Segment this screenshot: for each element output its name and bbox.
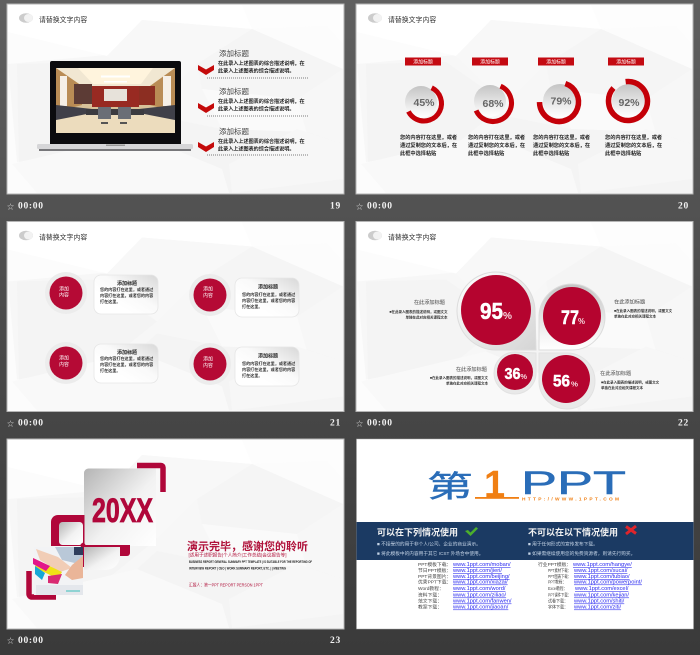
- links: right column: PPT素材下载：: [548, 567, 571, 574]
- card group top left: 内容打在这里，或者您的内容: [100, 292, 153, 298]
- label 56%: [600, 369, 660, 390]
- card group top right: 打在这里。: [242, 303, 262, 309]
- panel: slide 22 percentage bubbles: [356, 222, 693, 412]
- donut 92%: [605, 58, 662, 157]
- donut 92%: 您的内容打在这里，或者: [605, 133, 662, 141]
- donut 79%: 您的内容打在这里，或者: [533, 133, 590, 141]
- footer: slide 20: [356, 202, 689, 212]
- donut 79%: 此框中选择粘贴: [533, 149, 570, 157]
- footer: slide 21: 00:00: [18, 418, 44, 428]
- laptop with conference room photo: [37, 61, 193, 151]
- header: slide 22: 请替换文字内容: [388, 232, 436, 242]
- links: left column: Word教程：: [418, 585, 444, 592]
- card group bottom right: 添加标题: [258, 352, 278, 360]
- card group top right: 添加标题: [258, 284, 278, 290]
- header: slide 20: [368, 13, 436, 24]
- panel: slide 21 four cards: [7, 222, 344, 412]
- 20XX graphic: 20XX: [92, 492, 153, 530]
- label 77%: [614, 298, 673, 318]
- donut 68%: 68%: [482, 98, 504, 110]
- panel: slide 24 1PPT notice: [356, 439, 694, 629]
- footer: slide 22: [356, 418, 689, 428]
- header: slide 19: [19, 13, 87, 24]
- donut 79%: 添加标题: [546, 58, 566, 66]
- card group top right: 内容打在这里，或者您的内容: [242, 297, 295, 303]
- footer: slide 22: ☆: [356, 419, 363, 428]
- point 1: 此录入上述图表的综合描述说明。: [218, 68, 294, 74]
- footer: slide 23: 23: [330, 636, 341, 646]
- header: slide 20: 请替换文字内容: [388, 15, 436, 24]
- footer: slide 19: 19: [330, 202, 341, 212]
- links: right column: PPT图表下载：: [548, 573, 571, 580]
- links: left column: 节日PPT模板：: [418, 567, 451, 574]
- bubble 36%: [494, 352, 536, 394]
- band: usage rules: ■ 将此模板中的内容用于其它 ICST 外场合中使用。: [377, 550, 483, 557]
- card group bottom left: 添加: [59, 354, 69, 362]
- bubble 95%: %: [503, 311, 512, 322]
- donut 45%: 此框中选择粘贴: [400, 149, 437, 157]
- donut 68%: 添加标题: [480, 58, 500, 66]
- donut 45%: 您的内容打在这里，或者: [400, 133, 457, 141]
- label 95%: 在此添加标题: [414, 298, 445, 306]
- links: left column: www.1ppt.com/jiaoan/: [452, 604, 509, 610]
- point 1: [198, 48, 308, 78]
- label 56%: ■在此录入图表的描述说明，或图文文: [601, 380, 660, 384]
- links: left column: 资料下载：: [418, 592, 442, 598]
- band: usage rules: ■ 用于任何形式的宣传发布下载。: [528, 540, 598, 548]
- label 36%: 单独在此对应相关课程文本: [446, 380, 488, 386]
- bubble 36%: %: [520, 374, 528, 381]
- photo: hands with colour chart: [33, 547, 83, 595]
- point 2: 此录入上述图表的综合描述说明。: [218, 106, 294, 112]
- donut 92%: 通过复制您的文本后，在: [605, 141, 662, 149]
- band: usage rules: ■ 如果需继续使用您的免费资源者，则请先行购买。: [528, 550, 635, 557]
- point 3: 在此录入上述图表的综合描述说明，在: [218, 138, 305, 145]
- links: right column: 试卷下载：: [548, 598, 568, 604]
- donut 68%: 通过复制您的文本后，在: [468, 141, 525, 149]
- links: right column: www.1ppt.com/hangye/: [572, 562, 632, 568]
- card group bottom left: 打在这里。: [100, 367, 120, 373]
- label 36%: [430, 365, 488, 386]
- card group bottom right: 您的内容打在这里，或者通过: [242, 360, 295, 366]
- point 1: 添加标题: [219, 48, 249, 58]
- card group bottom right: 内容: [203, 362, 213, 369]
- links: right column: www.1ppt.com/ziti/: [573, 604, 622, 610]
- donut 45%: 添加标题: [413, 58, 433, 66]
- panel: slide 19 laptop with three points: [7, 4, 344, 194]
- donut 68%: 此框中选择粘贴: [468, 149, 505, 157]
- icon: red cross: [626, 526, 636, 534]
- point 2: [198, 86, 308, 116]
- donut 79%: [533, 58, 590, 157]
- donut 45%: 45%: [413, 97, 435, 109]
- card group top left: 添加: [59, 286, 69, 292]
- links: left column: www.1ppt.com/beijing/: [452, 574, 510, 580]
- band: usage rules: 不可以在以下情况使用: [528, 526, 618, 538]
- logo: 第1PPT: PPT: [521, 465, 626, 501]
- logo: 第1PPT: 1: [484, 464, 505, 506]
- card group top left: [45, 272, 158, 314]
- links: right column: PPT教程：: [548, 578, 566, 586]
- card group bottom left: 添加标题: [117, 349, 137, 356]
- bubble 56%: %: [571, 380, 578, 388]
- links: left column: www.1ppt.com/xiazai/: [452, 580, 508, 586]
- logo: 第1PPT: 第: [427, 471, 473, 504]
- card group bottom left: 内容打在这里，或者您的内容: [100, 361, 153, 367]
- links: left column: www.1ppt.com/moban/: [452, 562, 511, 568]
- label 56%: 在此添加标题: [600, 369, 631, 377]
- header: slide 22: [368, 231, 436, 242]
- point 3: 添加标题: [219, 126, 249, 136]
- closing message: INTERVIEW REPORT | CEO | WORK SUMMARY REPORT, ETC. | | MEETING: [189, 566, 286, 570]
- donut 92%: 此框中选择粘贴: [605, 149, 642, 157]
- label 95%: 单独在此对应相关课程文本: [406, 314, 448, 320]
- panel: slide 23 closing: [7, 439, 344, 629]
- links: right column: www.1ppt.com/excel/: [574, 586, 629, 592]
- point 2: 添加标题: [219, 86, 249, 96]
- card group bottom left: 内容: [59, 361, 69, 368]
- point 3: 此录入上述图表的综合描述说明。: [218, 146, 294, 152]
- links: left column: www.1ppt.com/jieri/: [452, 568, 502, 574]
- card group bottom left: [45, 342, 158, 384]
- closing message: 汇报人：第一PPT REPORT PERSON 1PPT: [189, 582, 263, 588]
- links: left column: www.1ppt.com/word/: [452, 586, 506, 592]
- links: right column: 行业PPT模板：: [538, 561, 571, 568]
- footer: slide 21: 21: [330, 418, 341, 428]
- label 56%: 单独在此对应相关课程文本: [601, 385, 643, 390]
- card group top left: 添加标题: [117, 280, 137, 287]
- links: right column: www.1ppt.com/sucai/: [573, 568, 628, 574]
- links: left column: 教案下载：: [418, 604, 442, 610]
- card group top left: 打在这里。: [100, 298, 120, 304]
- links: right column: www.1ppt.com/kejian/: [573, 592, 629, 598]
- links: left column: 优秀PPT下载：: [418, 578, 451, 586]
- header: slide 21: [19, 231, 87, 242]
- point 1: 在此录入上述图表的综合描述说明，在: [218, 60, 305, 67]
- 20XX graphic: [29, 466, 163, 597]
- card group bottom left: 您的内容打在这里，或者通过: [100, 355, 153, 361]
- donut 45%: 通过复制您的文本后，在: [400, 141, 457, 149]
- label 77%: 单独在此对应相关课程文本: [614, 314, 656, 318]
- footer: slide 21: [7, 418, 341, 428]
- bubble 77%: 77: [561, 308, 579, 329]
- donut 92%: 添加标题: [616, 58, 636, 66]
- closing message: BUSINESS REPORT GENERAL SUMMARY PPT TEMPLATE | IS SUITABLE FOR THE REPORTING OF: [189, 560, 312, 564]
- closing message: [187, 539, 312, 588]
- card group bottom right: [189, 343, 299, 386]
- header: slide 19: 请替换文字内容: [39, 15, 87, 24]
- footer: slide 19: [7, 202, 341, 212]
- card group top right: 内容: [203, 292, 213, 299]
- bubble 77%: [539, 284, 605, 350]
- donut 79%: 79%: [550, 96, 572, 108]
- footer: slide 20: ☆: [356, 202, 363, 211]
- band: usage rules: ■ 不接受的的用于非个人/公司、企业的商业演示。: [377, 540, 481, 548]
- band: usage rules: 可以在下列情况使用: [377, 526, 458, 538]
- links: left column: PPT背景图片：: [418, 573, 451, 580]
- panel: slide 20 four donut charts: [356, 4, 693, 194]
- card group top left: 您的内容打在这里，或者通过: [100, 286, 153, 292]
- links: left column: [418, 561, 512, 610]
- footer: slide 23: [7, 636, 341, 646]
- header: slide 21: 请替换文字内容: [39, 232, 87, 242]
- card group bottom right: 内容打在这里，或者您的内容: [242, 366, 295, 372]
- point 3: [198, 126, 308, 155]
- donut 68%: 您的内容打在这里，或者: [468, 133, 525, 141]
- card group bottom right: 打在这里。: [242, 372, 262, 378]
- links: right column: www.1ppt.com/powerpoint/: [573, 580, 642, 586]
- logo: 第1PPT: [427, 464, 626, 506]
- links: left column: 范文下载：: [418, 598, 442, 604]
- card group top right: 添加: [203, 286, 213, 292]
- label 36%: ■在此录入图表的描述说明，或图文文: [430, 375, 488, 380]
- band: usage rules: [356, 522, 694, 560]
- card group top right: [189, 274, 299, 317]
- links: left column: www.1ppt.com/fanwen/: [452, 598, 512, 604]
- donut 45%: [400, 58, 457, 157]
- logo: 第1PPT: HTTP://WWW.1PPT.COM: [522, 496, 619, 502]
- footer: slide 19: 00:00: [18, 202, 44, 212]
- links: left column: www.1ppt.com/ziliao/: [452, 592, 507, 598]
- label 77%: 在此添加标题: [614, 298, 645, 306]
- bubble 77%: %: [578, 317, 585, 326]
- card group top right: 您的内容打在这里，或者通过: [242, 291, 295, 297]
- footer: slide 21: ☆: [7, 419, 14, 428]
- card group top left: 内容: [59, 292, 69, 298]
- links: right column: www.1ppt.com/tubiao/: [573, 574, 630, 580]
- bubble 95%: 95: [480, 298, 503, 324]
- bubble 56%: 56: [553, 372, 570, 390]
- label 36%: 在此添加标题: [456, 365, 487, 373]
- label 95%: [389, 298, 448, 320]
- links: left column: PPT模板下载：: [418, 561, 451, 568]
- footer: slide 20: 00:00: [367, 202, 393, 212]
- links: right column: Excel教程：: [548, 585, 567, 592]
- footer: slide 23: ☆: [7, 636, 14, 645]
- footer: slide 23: 00:00: [18, 636, 44, 646]
- donut 92%: 92%: [618, 97, 640, 109]
- icon: green check: [465, 527, 478, 536]
- bubble 36%: 36: [504, 366, 521, 383]
- bubble 56%: [539, 353, 595, 409]
- footer: slide 22: 00:00: [367, 418, 393, 428]
- bubble 95%: [457, 272, 536, 350]
- card group bottom right: 添加: [203, 356, 213, 362]
- links: right column: www.1ppt.com/shiti/: [573, 598, 625, 604]
- closing message: 演示完毕，感谢您的聆听: [187, 539, 308, 553]
- label 77%: ■在此录入图表的描述说明，或图文文: [614, 308, 673, 313]
- footer: slide 20: 20: [678, 202, 689, 212]
- donut 68%: [468, 58, 525, 157]
- footer: slide 19: ☆: [7, 202, 14, 211]
- links: right column: [538, 561, 642, 610]
- closing message: [适用于述职报告|个人简介|工作总结|会议报告等]: [188, 552, 286, 558]
- point 2: 在此录入上述图表的综合描述说明，在: [218, 98, 305, 105]
- links: right column: PPT课件下载：: [548, 592, 571, 598]
- label 95%: ■在此录入图表的描述说明，或图文文: [389, 309, 448, 314]
- donut 79%: 通过复制您的文本后，在: [533, 141, 590, 149]
- links: right column: 字体下载：: [548, 604, 568, 610]
- footer: slide 22: 22: [678, 418, 689, 428]
